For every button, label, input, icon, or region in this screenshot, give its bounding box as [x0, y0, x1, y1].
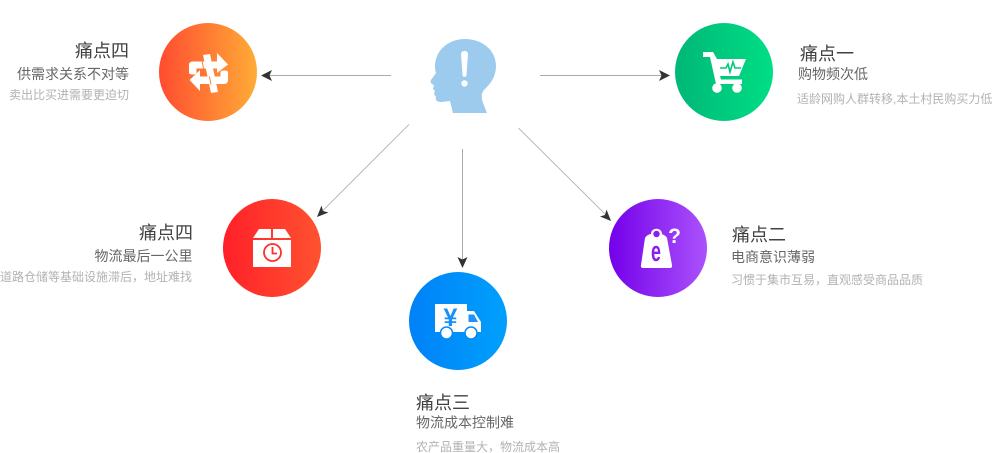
icon: parcel with clock in red circle: [223, 199, 321, 297]
subheading: 物流成本控制难: [416, 414, 514, 430]
arrow: head to pain point two: [518, 128, 611, 221]
arrow: head to pain point top left: [261, 70, 391, 81]
subheading: 购物频次低: [798, 66, 868, 82]
arrow: head to pain point one: [540, 70, 670, 81]
description: 适龄网购人群转移,本土村民购买力低: [797, 91, 992, 106]
heading: 痛点二: [732, 225, 786, 245]
description: 习惯于集市互易，直观感受商品品质: [731, 272, 923, 287]
description: 卖出比买进需要更迫切: [9, 88, 129, 102]
icon: delivery truck with yen in blue circle: ¥: [444, 304, 458, 332]
heading: 痛点四: [139, 223, 193, 243]
arrow: head to pain point three: [458, 149, 468, 268]
heading: 痛点三: [416, 393, 470, 413]
icon: shopping bag with question mark in purple circle: e: [651, 237, 661, 268]
subheading: 供需求关系不对等: [17, 66, 129, 82]
icon: delivery truck with yen in blue circle: [409, 272, 507, 370]
icon: head with exclamation mark: [431, 39, 496, 113]
subheading: 电商意识薄弱: [731, 249, 815, 265]
icon: shopping cart in green circle: [675, 23, 773, 121]
description: 道路仓储等基础设施滞后，地址难找: [0, 269, 192, 284]
panel: pain point two: [609, 199, 923, 297]
panel: pain point three: [409, 272, 560, 453]
icon: swap arrows in orange circle: [159, 23, 257, 121]
panel: pain point one: [675, 23, 992, 121]
panel: supply and demand mismatch: [9, 23, 257, 121]
arrow: head to logistics pain point: [317, 124, 409, 217]
panel: last mile logistics: [0, 199, 321, 297]
icon: shopping bag with question mark in purple circle: [609, 199, 707, 297]
heading: 痛点四: [75, 41, 129, 61]
subheading: 物流最后一公里: [94, 248, 192, 264]
heading: 痛点一: [800, 44, 854, 64]
icon: shopping bag with question mark in purple circle: ?: [668, 225, 681, 248]
